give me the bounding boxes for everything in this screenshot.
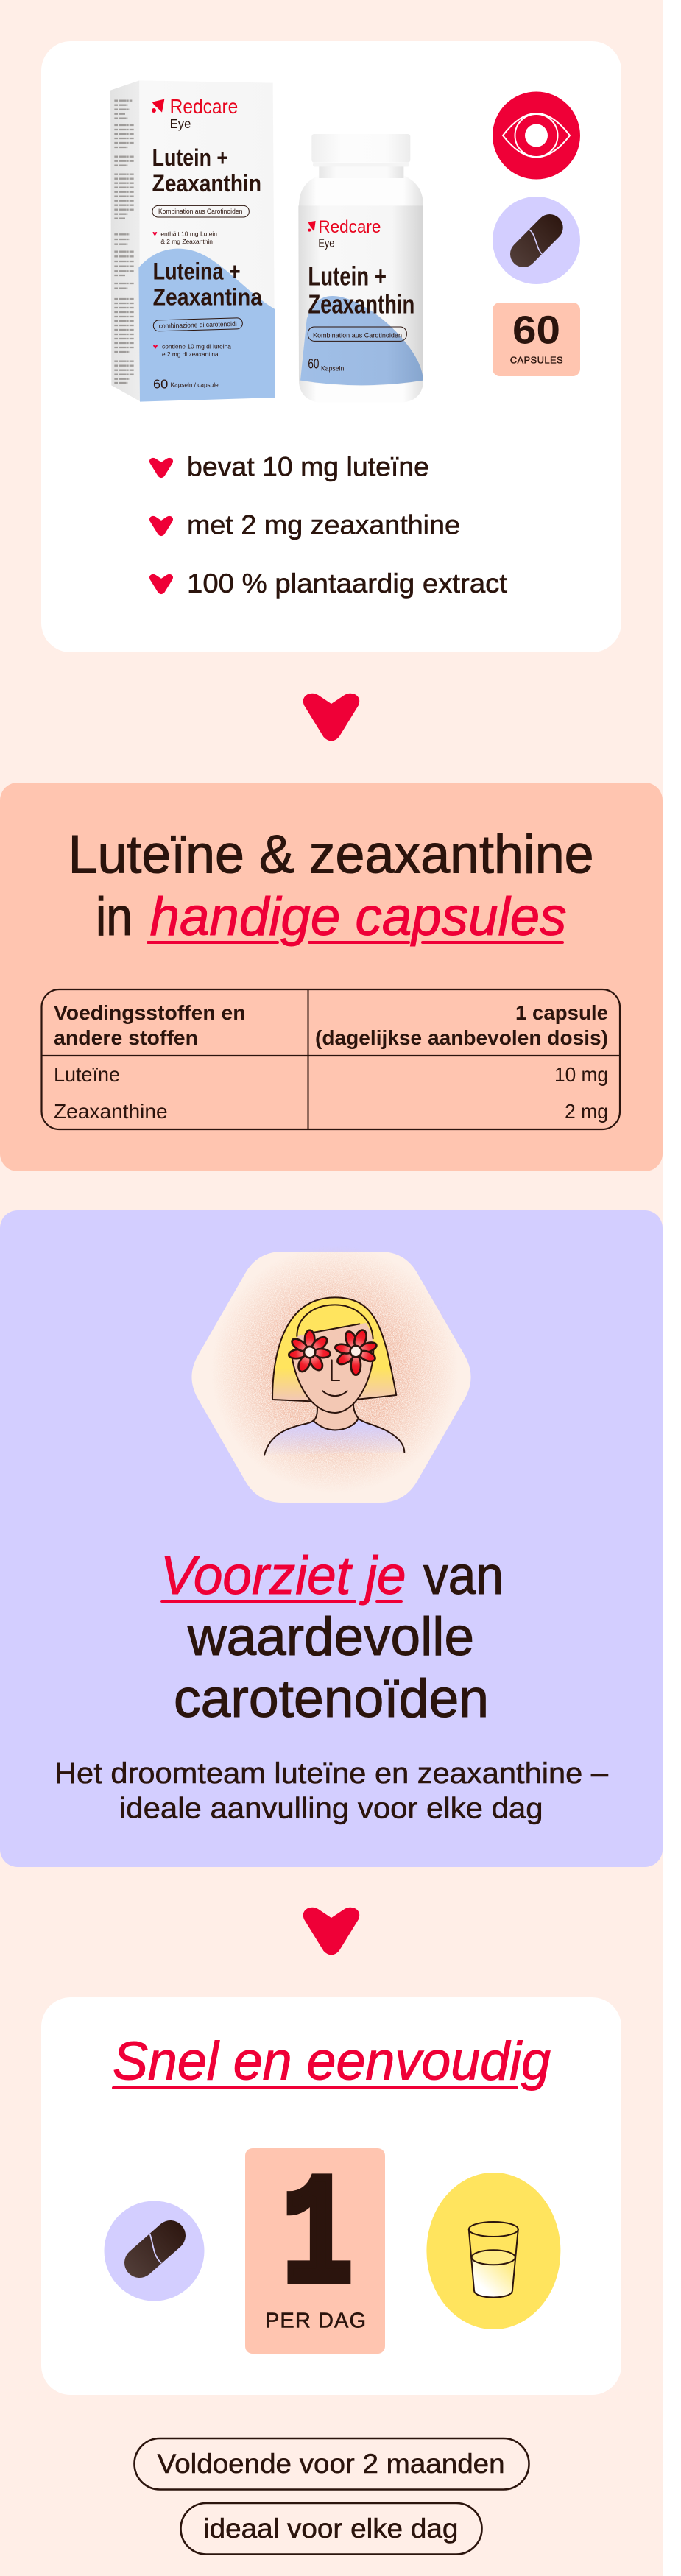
badge: 60 capsules: 60 [512, 308, 560, 353]
bottle blue shape [300, 296, 423, 385]
card background [41, 41, 621, 652]
bullet: zeaxanthin: met 2 mg zeaxanthine [187, 510, 460, 540]
box title italian: Luteina + [153, 258, 241, 284]
bottle body [299, 175, 423, 403]
panel: carotenoids [0, 1210, 663, 1867]
nutrition table: andere stoffen [54, 1026, 198, 1049]
nose [332, 1360, 339, 1380]
bottle title line 2: Zeaxanthin [308, 289, 414, 320]
badge: 60 capsules [493, 303, 580, 376]
left flower eye [288, 1330, 331, 1374]
heading: Snel en eenvoudig [113, 2032, 551, 2092]
pill: two months: Voldoende voor 2 maanden [158, 2449, 505, 2479]
nutrition table: Luteïne [54, 1063, 120, 1086]
subtext [54, 1757, 609, 1825]
heading line 2: in [96, 887, 133, 947]
pill: every day: ideaal voor elke dag [203, 2513, 458, 2544]
nutrition table: Zeaxanthine [54, 1100, 168, 1123]
box italian pill: combinazione di carotenoidi [159, 320, 237, 330]
icon: glass of water [426, 2173, 560, 2329]
nutrition table: 1 capsule [515, 1001, 608, 1024]
box side panel [110, 80, 140, 401]
box count: 60 [153, 376, 168, 391]
nutrition table: 2 mg [565, 1100, 608, 1123]
nutrition table [41, 989, 620, 1129]
face [292, 1305, 373, 1413]
nutrition table: Voedingsstoffen en [54, 1001, 246, 1024]
subtext: ideale aanvulling voor elke dag [119, 1793, 543, 1825]
arrow: heart 2 [303, 1908, 359, 1955]
bottle neck [319, 166, 403, 178]
box german pill text: Kombination aus Carotinoiden [158, 208, 242, 215]
bottle collar [313, 163, 409, 166]
pill: every day [181, 2503, 481, 2555]
hair [272, 1297, 396, 1401]
panel: capsules and table [0, 783, 663, 1171]
nutrition table: (dagelijkse aanbevolen dosis) [315, 1026, 608, 1049]
neck [314, 1404, 359, 1430]
heading line 1: Luteïne & zeaxanthine [68, 825, 594, 885]
pill: two months [134, 2438, 529, 2490]
box title italian line 2: Zeaxantina [153, 283, 262, 310]
box brand: Redcare [170, 95, 238, 118]
heading: Voorziet je [160, 1546, 406, 1606]
bottle count label: Kapseln [321, 364, 344, 372]
product box [110, 80, 275, 402]
hexagon glow [211, 1246, 459, 1493]
heading: waardevolle [187, 1607, 474, 1667]
box italian pill [153, 318, 243, 331]
nutrition table: 10 mg [554, 1063, 608, 1086]
icon: capsule [493, 197, 580, 284]
box title german line 2: Zeaxanthin [152, 170, 261, 197]
bottle title: Lutein + [308, 261, 387, 291]
box heart 2 [153, 345, 158, 349]
box front panel [139, 80, 275, 401]
hexagon badge [191, 1252, 471, 1503]
box heart [152, 232, 157, 236]
bottle cap [311, 134, 410, 163]
smile [322, 1391, 347, 1396]
box title german: Lutein + [152, 144, 228, 171]
box count label: Kapseln / capsule [171, 381, 219, 388]
box german claim: enthält 10 mg Lutein [160, 230, 217, 237]
heading [160, 1546, 504, 1729]
card background [41, 1997, 621, 2395]
box eye label: Eye [170, 116, 191, 131]
badge: one per day [245, 2148, 385, 2354]
bottle pill [308, 327, 406, 341]
icon: capsule [105, 2201, 205, 2301]
right flower eye [334, 1328, 378, 1375]
bottle logo [308, 221, 316, 232]
badge: 60 capsules: CAPSULES [510, 354, 563, 365]
box italian claim: contiene 10 mg di luteina [162, 343, 232, 350]
heading: carotenoïden [174, 1669, 489, 1729]
arrow: heart 1 [303, 694, 359, 741]
bottle brand: Redcare [318, 217, 381, 237]
subtext: Het droomteam luteïne en zeaxanthine – [54, 1757, 609, 1790]
shoulders and shirt [264, 1419, 404, 1455]
bottle pill text: Kombination aus Carotinoiden [313, 331, 402, 339]
salmon background [0, 783, 663, 1171]
box logo [152, 99, 164, 113]
box german claim line 2: & 2 mg Zeaxanthin [160, 239, 213, 245]
box italian claim line 2: e 2 mg di zeaxantina [162, 351, 219, 358]
panel: quick and easy [41, 1997, 621, 2395]
bottle count: 60 [308, 357, 319, 373]
badge: one per day: PER DAG [265, 2309, 366, 2333]
box blue shape [138, 249, 275, 402]
bullet: lutein: bevat 10 mg luteïne [187, 452, 429, 482]
icon: eye [493, 91, 580, 180]
bottle eye label: Eye [318, 238, 334, 250]
badge: one per day: 1 [282, 2151, 353, 2328]
bullet: plant extract: 100 % plantaardig extract [187, 568, 508, 599]
panel: product card [41, 41, 621, 652]
box german pill [152, 205, 249, 217]
lavender background [0, 1210, 663, 1867]
product bottle [298, 134, 423, 403]
illustration: woman with flower eyes [264, 1297, 404, 1455]
fringe lines [297, 1305, 373, 1338]
heading: van [423, 1546, 504, 1606]
face outline [292, 1347, 373, 1413]
fringe [297, 1305, 368, 1336]
bottle label [298, 205, 423, 386]
heading line 2: handige capsules [150, 887, 567, 947]
